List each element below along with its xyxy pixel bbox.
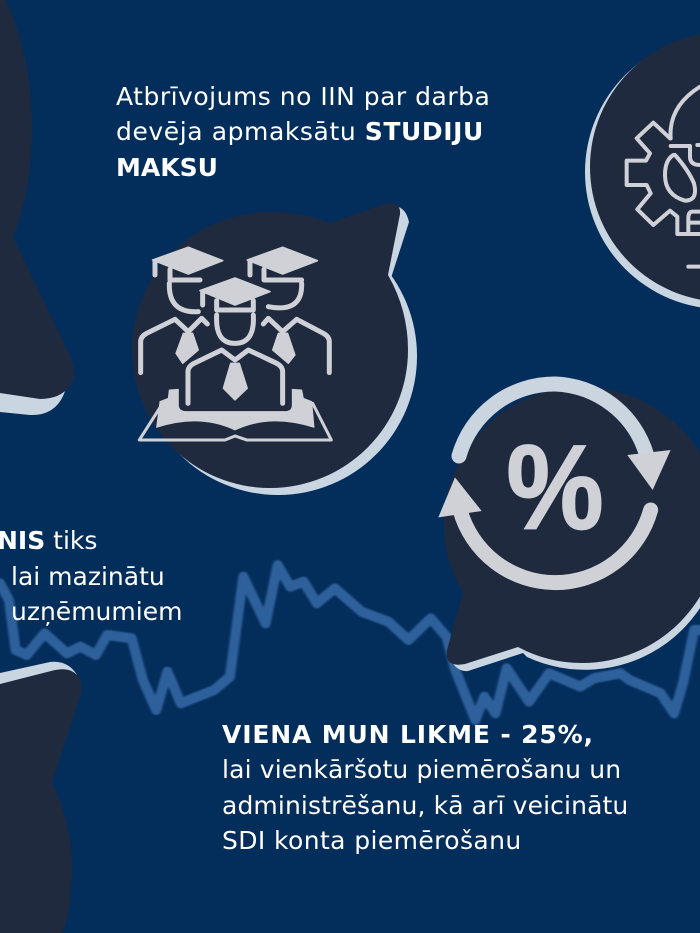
text block: study fee exemption [116, 82, 490, 182]
text block: reduced rate (cropped) [0, 526, 182, 626]
icon: gear and head [627, 87, 700, 267]
centre graduate [188, 278, 283, 403]
icon: three graduates with open book [139, 247, 331, 440]
bubble shadow [585, 35, 700, 309]
bubble shadow [139, 207, 417, 495]
speech bubble: top left (cropped) [0, 0, 74, 415]
left graduate [141, 247, 223, 373]
text block: single rate 25% [222, 720, 628, 855]
speech bubble with percent icon [438, 384, 700, 671]
icon: circular arrows with percent [438, 384, 671, 583]
text block: study fee exemption: MAKSU [116, 153, 218, 182]
upper arrow [459, 384, 671, 490]
text block: single rate 25%: lai vienkāršotu piemērošanu un [222, 755, 621, 784]
text block: reduced rate (cropped): lai mazinātu [11, 562, 165, 591]
speech bubble with gear and head icon [585, 32, 700, 309]
speech bubble with graduates icon [132, 203, 417, 495]
text block: study fee exemption: Atbrīvojums no IIN par darba [116, 82, 490, 111]
text block: reduced rate (cropped): uzņēmumiem [11, 597, 182, 626]
lower arrow [438, 477, 651, 583]
text block: reduced rate (cropped): NIS tiks [0, 526, 97, 555]
open book [139, 389, 331, 440]
line chart: background stock trend [0, 565, 700, 720]
text block: single rate 25%: administrēšanu, kā arī veicinātu [222, 791, 628, 820]
text block: study fee exemption: devēja apmaksātu STUDIJU [116, 117, 484, 146]
bubble body [444, 387, 700, 665]
bubble body [590, 32, 700, 302]
bubble shadow [452, 532, 700, 671]
speech bubble: bottom left (cropped) [0, 662, 82, 933]
right graduate [247, 247, 329, 373]
percent sign: % [506, 421, 604, 555]
text block: single rate 25%: VIENA MUN LIKME - 25%, [222, 720, 594, 749]
text block: single rate 25%: SDI konta piemērošanu [222, 826, 522, 855]
bubble body [132, 203, 408, 488]
